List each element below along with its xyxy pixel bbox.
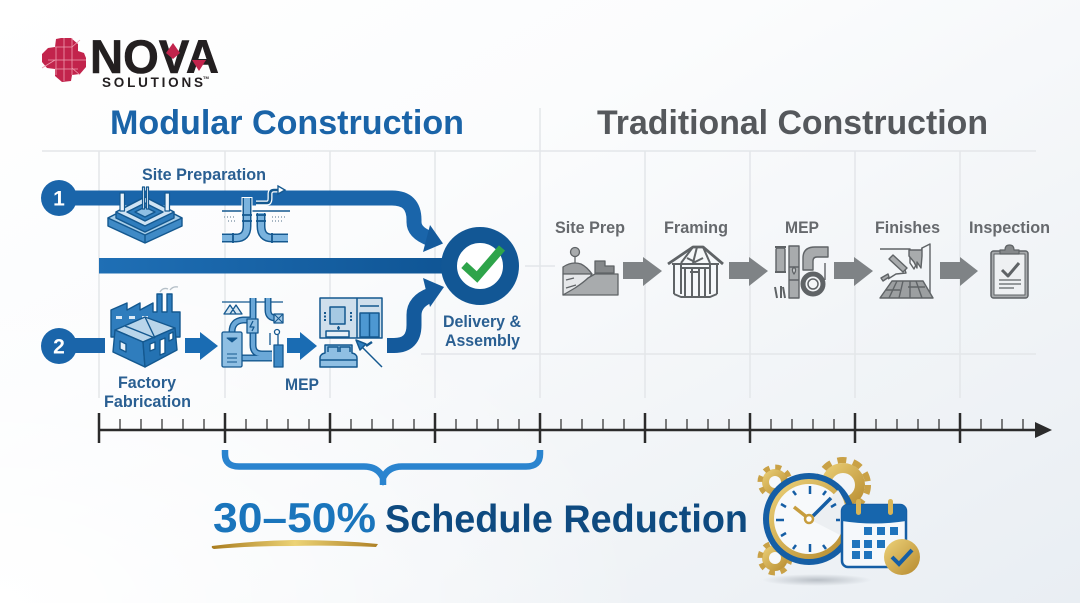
arrow: MEP to finishes	[834, 257, 873, 286]
badge: step 2: 2	[53, 336, 65, 358]
label: inspection: Inspection	[969, 219, 1050, 237]
badge: step 1: 1	[53, 188, 65, 210]
icon: inspection clipboard	[991, 245, 1028, 298]
callout: schedule reduction	[212, 494, 748, 549]
arrow: track 2 flow to delivery	[387, 278, 444, 346]
logo red triangles	[166, 43, 206, 71]
arrow: site prep to framing	[623, 257, 662, 286]
icon: gold check badge	[884, 539, 920, 575]
panel: traditional construction sequence	[555, 219, 1050, 298]
label: factory fabrication: Factory	[118, 374, 177, 392]
arrow: framing to MEP	[729, 257, 768, 286]
icon: finished room module	[320, 298, 382, 367]
icon: MEP systems	[222, 298, 283, 367]
icon: delivery check circle	[449, 235, 511, 297]
label: factory fabrication	[104, 374, 191, 411]
icon: timber frame house	[668, 247, 723, 297]
icon: calendar	[842, 499, 906, 567]
percentage figure: 30–50%	[213, 494, 376, 541]
label: delivery and assembly	[443, 313, 521, 350]
icon: factory with module	[111, 287, 180, 367]
icon: MEP pipes and cable	[775, 246, 828, 298]
arrow: track 1 flow to delivery	[59, 198, 443, 252]
icon: red logo cross	[42, 38, 86, 82]
bracket: schedule savings span	[225, 450, 540, 485]
icon: gears	[760, 460, 868, 573]
icon: clock, gears and calendar	[760, 460, 920, 586]
heading: Traditional Construction: Traditional Construction	[597, 104, 988, 142]
icon: site prep land and truck	[563, 248, 618, 295]
icon: foundation	[108, 187, 182, 243]
label: factory fabrication: Fabrication	[104, 393, 191, 411]
trademark: TM	[203, 75, 209, 80]
icon: paint roller and flooring	[880, 244, 933, 298]
label: delivery and assembly: Assembly	[445, 332, 521, 350]
label: delivery and assembly: Delivery &	[443, 313, 521, 331]
logo subtitle: SOLUTIONS	[102, 75, 203, 90]
label: framing: Framing	[664, 219, 728, 237]
logo wordmark: NOVA	[90, 30, 219, 83]
logo: Nova Solutions	[42, 30, 219, 90]
label: site preparation: Site Preparation	[142, 166, 266, 184]
arrow: middle flow bar	[99, 258, 449, 274]
callout text: Schedule Reduction	[385, 498, 748, 541]
icon: underground pipes	[222, 186, 290, 243]
label: MEP: MEP	[285, 376, 319, 394]
badge: step 2	[41, 328, 105, 364]
gold underline	[212, 540, 378, 549]
panel: modular construction flow	[41, 166, 521, 411]
arrow: factory to MEP	[185, 332, 218, 360]
arrow: finishes to inspection	[940, 257, 978, 286]
chart: timeline axis	[99, 413, 1052, 443]
label: finishes: Finishes	[875, 219, 940, 237]
icon: clock	[763, 473, 855, 565]
heading: Modular Construction: Modular Construction	[110, 104, 464, 142]
label: site prep: Site Prep	[555, 219, 625, 237]
badge: step 1	[41, 180, 77, 216]
arrow: MEP to interiors	[287, 332, 317, 360]
label: MEP: MEP	[785, 219, 819, 237]
